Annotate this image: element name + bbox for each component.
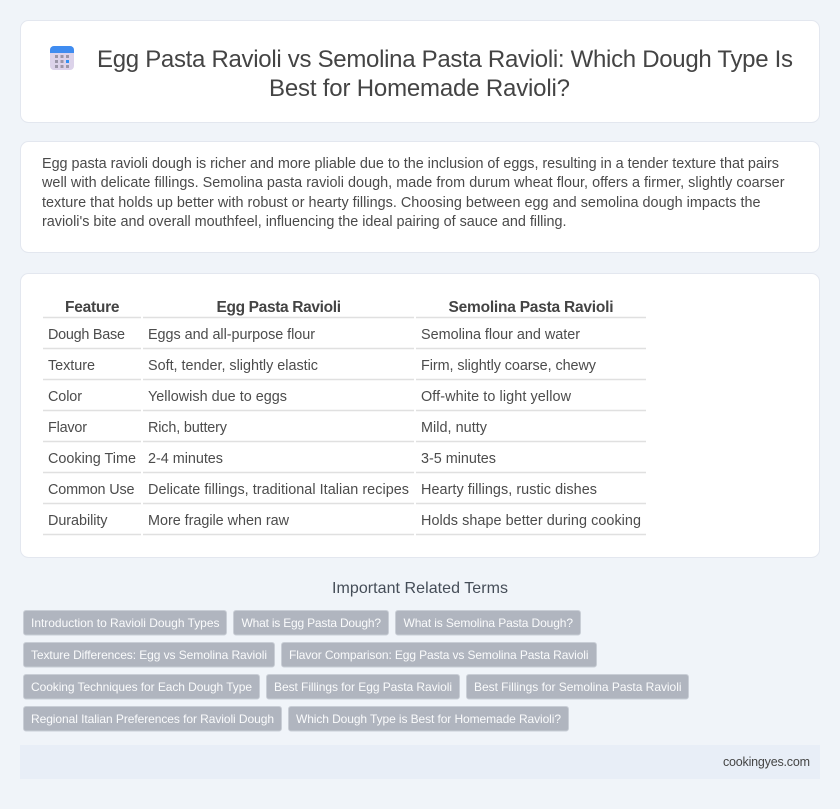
- chip: Flavor Comparison: Egg Pasta vs Semolina Pasta Ravioli: [289, 648, 588, 662]
- chip: [396, 610, 580, 635]
- table header: Egg Pasta Ravioli: [216, 299, 341, 316]
- chip: [24, 706, 282, 731]
- table row: durability: [48, 513, 641, 529]
- table header: Feature: [65, 299, 120, 316]
- chip: Cooking Techniques for Each Dough Type: [31, 680, 252, 694]
- table row: texture: Soft, tender, slightly elastic: [148, 358, 318, 374]
- chip: [24, 642, 274, 667]
- chip: Which Dough Type is Best for Homemade Ravioli?: [296, 712, 561, 726]
- table header: [65, 299, 614, 316]
- table row: cooking time: Cooking Time: [48, 451, 136, 467]
- chip: Introduction to Ravioli Dough Types: [31, 616, 220, 630]
- chip: What is Semolina Pasta Dough?: [404, 616, 573, 630]
- related terms chips: [24, 610, 688, 731]
- text block: introduction: texture that holds up better with robust or hearty fillings. Choosing between egg and semolina dough impacts the: [42, 195, 760, 211]
- table row: color: Off-white to light yellow: [421, 389, 572, 405]
- table row: flavor: Flavor: [48, 420, 87, 436]
- heading: related terms: Important Related Terms: [332, 580, 508, 597]
- table row: texture: Firm, slightly coarse, chewy: [421, 358, 597, 374]
- text block: introduction: ravioli's bite and overall mouthfeel, influencing the ideal pairing of sauce and filling.: [42, 214, 566, 230]
- chip: [288, 706, 568, 731]
- table row: color: Color: [48, 389, 82, 405]
- table row: dough base: Eggs and all-purpose flour: [148, 327, 315, 343]
- panel: comparison table: [20, 274, 820, 558]
- chip: [24, 610, 226, 635]
- table row: flavor: [48, 420, 488, 436]
- table row: dough base: Semolina flour and water: [421, 327, 580, 343]
- chip: What is Egg Pasta Dough?: [242, 616, 381, 630]
- chip: [266, 674, 460, 699]
- chip: Regional Italian Preferences for Ravioli Dough: [31, 712, 274, 726]
- table header: Semolina Pasta Ravioli: [448, 299, 614, 316]
- table row: durability: Holds shape better during cooking: [421, 513, 641, 529]
- table row: common use: Common Use: [48, 482, 134, 498]
- chip: [234, 610, 388, 635]
- table row: common use: Delicate fillings, traditional Italian recipes: [148, 482, 409, 498]
- chip: Best Fillings for Semolina Pasta Ravioli: [474, 680, 682, 694]
- chip: [282, 642, 596, 667]
- chip: [466, 674, 688, 699]
- table row: cooking time: [48, 451, 496, 467]
- heading: [97, 46, 793, 102]
- table row: dough base: Dough Base: [48, 327, 125, 343]
- panel: introduction: [20, 142, 820, 252]
- table row: common use: [48, 482, 597, 498]
- table row: color: Yellowish due to eggs: [148, 389, 287, 405]
- table row: durability: Durability: [48, 513, 108, 529]
- table row: dough base: [48, 327, 580, 343]
- table row: cooking time: 3-5 minutes: [421, 451, 496, 467]
- text block: introduction: well with delicate fillings. Semolina pasta ravioli dough, made from durum wheat flour, offers a firmer, slightly coarser: [41, 175, 785, 191]
- table row: durability: More fragile when raw: [148, 513, 290, 529]
- table row: cooking time: 2-4 minutes: [148, 451, 223, 467]
- text block: introduction: Egg pasta ravioli dough is richer and more pliable due to the inclusion of eggs, resulting in a tender texture that pairs: [42, 156, 779, 172]
- table row: color: [48, 389, 572, 405]
- footer: cookingyes.com: [723, 755, 810, 769]
- table row: flavor: Rich, buttery: [148, 420, 228, 436]
- table row: texture: Texture: [48, 358, 95, 374]
- panel: title: [20, 20, 820, 122]
- heading: Best for Homemade Ravioli?: [269, 75, 570, 102]
- table row: texture: [48, 358, 597, 374]
- text block: introduction: [41, 156, 785, 230]
- chip: Best Fillings for Egg Pasta Ravioli: [274, 680, 452, 694]
- icon: calendar: [50, 46, 74, 70]
- heading: Egg Pasta Ravioli vs Semolina Pasta Ravioli: Which Dough Type Is: [97, 46, 793, 73]
- chip: Texture Differences: Egg vs Semolina Ravioli: [31, 648, 267, 662]
- table row: flavor: Mild, nutty: [421, 420, 488, 436]
- footer: [20, 745, 820, 779]
- chip: [24, 674, 260, 699]
- table row: common use: Hearty fillings, rustic dishes: [421, 482, 597, 498]
